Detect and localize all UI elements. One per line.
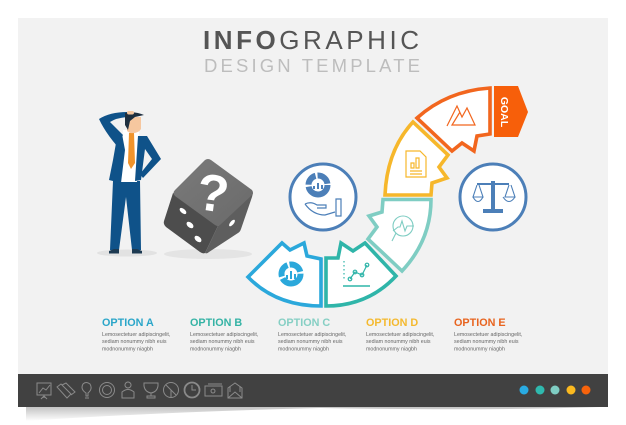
- icon: clock hands: [192, 385, 196, 390]
- option E text: sediam nonummy nibh euis: [454, 339, 519, 345]
- icon: balance: [473, 181, 515, 213]
- goal tag: [494, 86, 528, 137]
- segment C: [368, 200, 431, 271]
- option A text: OPTION A: [102, 317, 154, 329]
- option E text: [454, 317, 522, 352]
- icon: presentation board: [37, 383, 51, 399]
- option D text: OPTION D: [366, 317, 418, 329]
- left face: [164, 193, 218, 253]
- ground shadow: [97, 250, 157, 256]
- option B text: Lemosectetuer adipiscingelit,: [190, 332, 258, 338]
- bottom shadow: [26, 407, 600, 421]
- icon: donut over hand: [305, 176, 341, 216]
- circle icon: scales: [460, 164, 526, 230]
- icon: no sign bar: [166, 385, 176, 397]
- right face: [205, 193, 253, 253]
- goal tag: GOAL: [498, 97, 510, 128]
- top face: [174, 159, 253, 226]
- icon: envelope: [228, 383, 242, 398]
- jacket left: [109, 134, 125, 183]
- icon: mountains: [447, 106, 475, 126]
- option B text: [190, 317, 258, 352]
- title: DESIGN TEMPLATE: [204, 55, 420, 76]
- icon: cash: [205, 384, 222, 396]
- icon: donut chart: [282, 264, 300, 284]
- option C text: [278, 317, 346, 352]
- shoes: [109, 249, 142, 254]
- raised arm: [99, 112, 127, 146]
- pips: [179, 207, 236, 243]
- icon: gear centre: [102, 386, 112, 394]
- option E text: modnonummy niagbh: [454, 346, 505, 352]
- option B text: modnonummy niagbh: [190, 346, 241, 352]
- option A text: Lemosectetuer adipiscingelit,: [102, 332, 170, 338]
- option D text: sediam nonummy nibh euis: [366, 339, 431, 345]
- option E text: Lemosectetuer adipiscingelit,: [454, 332, 522, 338]
- option C text: Lemosectetuer adipiscingelit,: [278, 332, 346, 338]
- option B text: OPTION B: [190, 317, 242, 329]
- icon: gear: [100, 382, 114, 398]
- footer bar: [18, 374, 608, 407]
- head: [127, 117, 141, 133]
- option D text: [366, 317, 434, 352]
- option E text: OPTION E: [454, 317, 506, 329]
- segment A: [248, 243, 321, 306]
- option A text: sediam nonummy nibh euis: [102, 339, 167, 345]
- icon: line chart: [343, 261, 370, 286]
- icon: person: [122, 382, 134, 398]
- option A text: modnonummy niagbh: [102, 346, 153, 352]
- colour dots: [520, 386, 590, 394]
- option C text: modnonummy niagbh: [278, 346, 329, 352]
- footer icons: [37, 382, 242, 399]
- option C text: OPTION C: [278, 317, 330, 329]
- option A text: [102, 317, 170, 352]
- hand: [127, 111, 134, 114]
- icon: tools: [57, 383, 75, 398]
- segment D: [385, 122, 448, 195]
- segment B: [326, 243, 396, 306]
- businessman figure: [97, 111, 161, 256]
- option D text: Lemosectetuer adipiscingelit,: [366, 332, 434, 338]
- option C text: sediam nonummy nibh euis: [278, 339, 343, 345]
- icon: light bulb: [82, 382, 91, 398]
- option B text: sediam nonummy nibh euis: [190, 339, 255, 345]
- segment E: [417, 88, 490, 151]
- icon: trophy: [144, 383, 158, 398]
- title: INFOGRAPHIC: [203, 25, 419, 55]
- background panel: [18, 18, 608, 374]
- question mark: ?: [193, 163, 232, 225]
- shirt: [120, 130, 139, 182]
- title: [203, 25, 420, 76]
- icon: pulse magnifier: [392, 216, 414, 241]
- question dice: [164, 159, 253, 259]
- circle icon: hand with chart: [290, 164, 356, 230]
- icon: clock: [184, 382, 200, 398]
- hair: [125, 112, 144, 130]
- legs: [110, 181, 141, 250]
- jacket right: [135, 136, 161, 181]
- icon: document chart: [406, 151, 426, 177]
- curved option path: [248, 86, 528, 306]
- ground shadow: [164, 249, 252, 259]
- option D text: modnonummy niagbh: [366, 346, 417, 352]
- icon: no sign: [164, 382, 178, 398]
- tie: [128, 133, 135, 169]
